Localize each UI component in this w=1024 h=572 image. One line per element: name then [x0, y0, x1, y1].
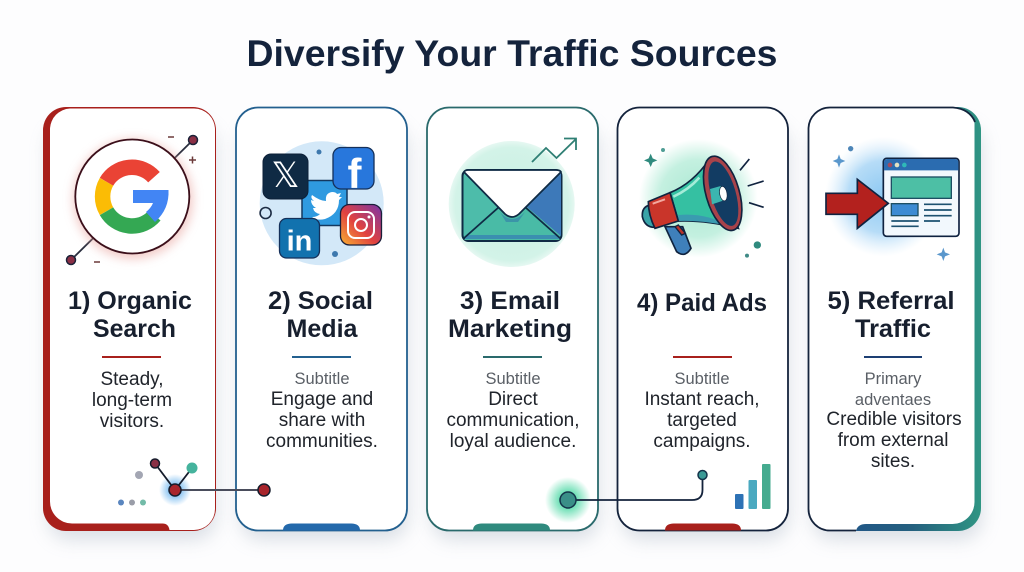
icon: megaphone	[639, 139, 764, 258]
panel: paid ads	[618, 108, 789, 540]
heading: 1) Organic	[68, 287, 192, 315]
description: communities.	[266, 431, 378, 452]
description: communication,	[446, 410, 580, 431]
description: visitors.	[100, 411, 164, 432]
description: campaigns.	[653, 431, 751, 452]
heading: Media	[286, 315, 359, 343]
description: sites.	[871, 451, 915, 472]
heading	[448, 287, 572, 343]
icon: social network	[260, 141, 384, 265]
icon: google	[66, 136, 198, 264]
heading: 4) Paid Ads	[637, 289, 767, 317]
description: Engage and	[271, 389, 373, 410]
description: adventaes	[855, 391, 931, 409]
description: Primary	[865, 370, 922, 388]
description	[92, 369, 172, 432]
icon: browser with arrow	[825, 137, 959, 261]
description: long-term	[92, 390, 172, 411]
panel: organic search	[43, 107, 216, 540]
icon: social network: f	[348, 150, 362, 197]
description: Subtitle	[485, 370, 541, 388]
description: Subtitle	[294, 370, 350, 388]
heading	[268, 287, 373, 343]
heading: Marketing	[448, 315, 572, 343]
heading: 5) Referral	[828, 287, 954, 315]
heading	[68, 287, 192, 343]
description: Subtitle	[674, 370, 730, 388]
icon: envelope	[449, 138, 576, 267]
panel: email marketing	[427, 108, 599, 540]
icon: social network: 𝕏	[271, 156, 300, 196]
title: Diversify Your Traffic Sources	[246, 33, 778, 74]
description: Direct	[488, 389, 539, 410]
panel: referral traffic	[808, 107, 982, 540]
description	[826, 370, 962, 472]
description	[644, 370, 760, 452]
description	[446, 370, 580, 452]
description: from external	[838, 430, 948, 451]
connector: organic to social	[118, 459, 270, 506]
description: share with	[279, 410, 365, 431]
description: Credible visitors	[826, 409, 962, 430]
description	[266, 370, 378, 452]
heading	[828, 287, 954, 343]
connector: email to paid ads	[545, 470, 707, 523]
heading: 2) Social	[268, 287, 373, 315]
panel: social media	[236, 108, 408, 540]
heading: Search	[93, 315, 176, 343]
bar chart	[735, 464, 770, 509]
icon: social network: in	[287, 226, 312, 258]
heading: Traffic	[855, 315, 931, 343]
description: targeted	[667, 410, 737, 431]
description: Steady,	[100, 369, 164, 390]
heading: 3) Email	[460, 287, 560, 315]
description: loyal audience.	[450, 431, 576, 452]
description: Instant reach,	[644, 389, 760, 410]
